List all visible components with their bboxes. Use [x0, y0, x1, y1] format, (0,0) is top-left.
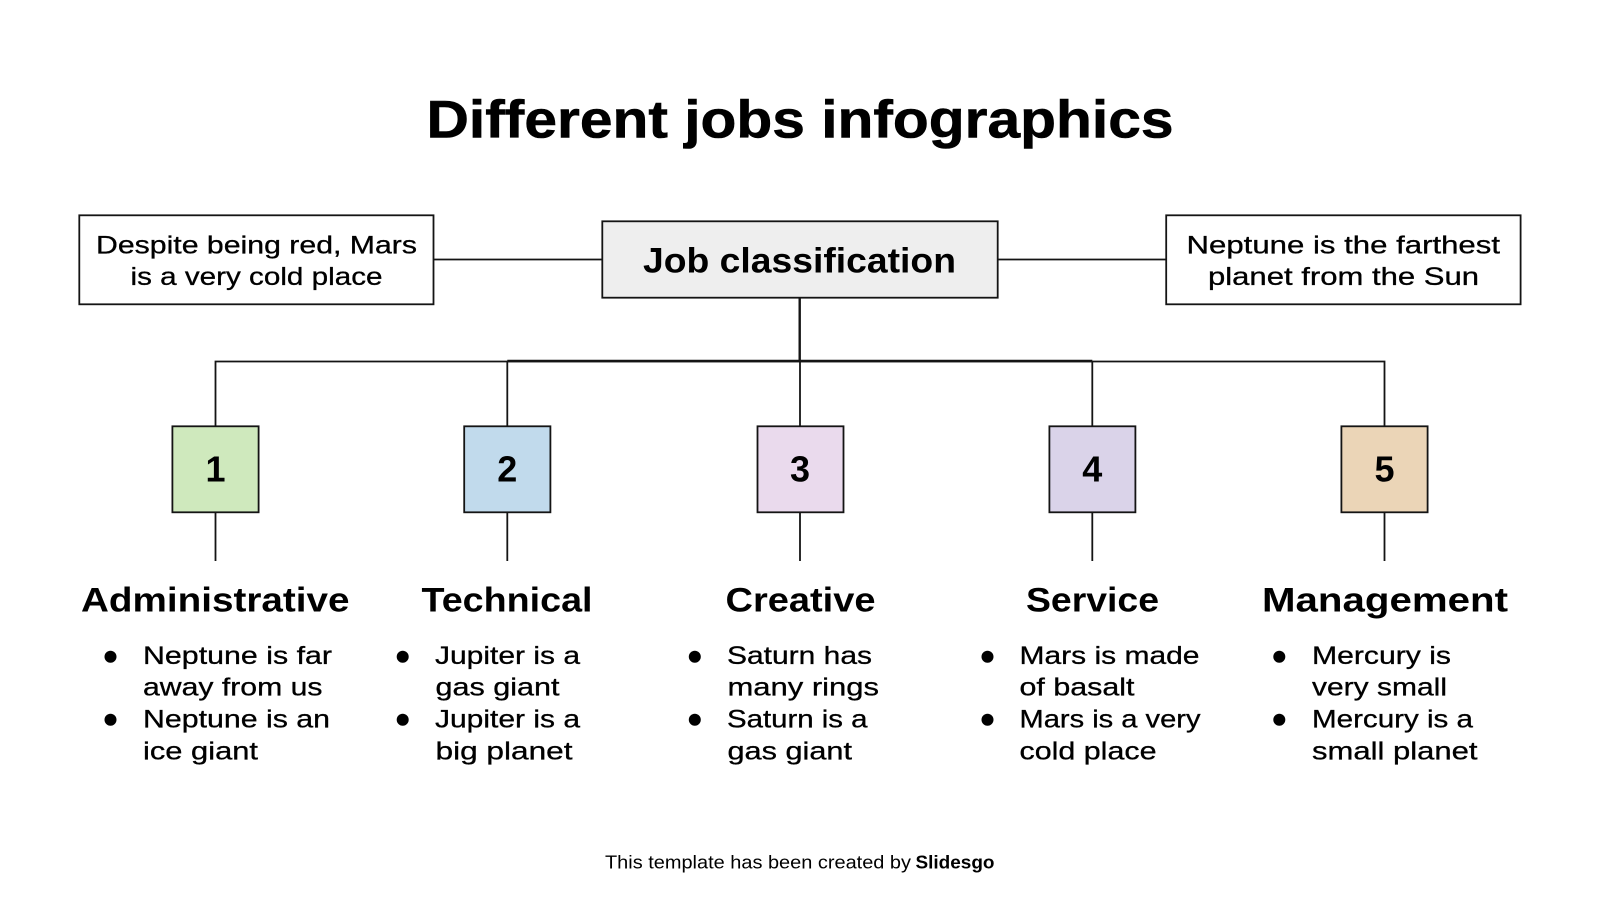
column: Administrative: [81, 426, 350, 765]
bullet list: Service: Mars is a very: [1020, 706, 1201, 734]
bullet list: Administrative: Neptune is an: [143, 706, 330, 734]
bullet list: Service: [982, 642, 1201, 765]
bullet list: Administrative: Neptune is far: [143, 642, 332, 670]
heading: Management: Management: [1262, 582, 1508, 620]
central box: job classification: Job classification: [643, 242, 956, 280]
number box 5: [1341, 426, 1428, 512]
bullet list: Technical: Jupiter is a: [435, 642, 580, 670]
bullet list: Technical: Jupiter is a: [435, 706, 580, 734]
bullet list: Technical: [397, 642, 580, 765]
column: Service: [982, 426, 1201, 765]
bullet list: Service: of basalt: [1020, 674, 1135, 702]
callout: Neptune: Neptune is the farthest: [1186, 231, 1500, 259]
heading: Administrative: Administrative: [81, 582, 350, 620]
bullet list: Creative: Saturn is a: [727, 706, 868, 734]
bullet list: Service: cold place: [1020, 737, 1156, 765]
bullet list: Administrative: [104, 642, 332, 765]
callout: Mars: [79, 215, 434, 304]
callout: Neptune: planet from the Sun: [1208, 263, 1479, 291]
number box 4: 4: [1082, 449, 1102, 490]
bullet list: Creative: many rings: [728, 674, 879, 702]
number box 4: [1049, 426, 1135, 512]
number box 5: 5: [1374, 449, 1395, 490]
bullet list: Creative: Saturn has: [727, 642, 872, 670]
bullet list: Technical: gas giant: [436, 674, 560, 702]
number box 3: [758, 426, 844, 512]
footer credit: Slidesgo: [916, 852, 995, 872]
bullet list: Management: small planet: [1312, 737, 1478, 765]
heading: Service: Service: [1026, 582, 1159, 620]
number box 1: 1: [205, 449, 226, 490]
central box: job classification: [602, 221, 998, 298]
connector lines: [216, 260, 1384, 561]
callout: Mars: Despite being red, Mars: [96, 231, 417, 259]
bullet list: Management: Mercury is: [1312, 642, 1451, 670]
bullet list: Management: very small: [1312, 674, 1447, 702]
number box 2: [464, 426, 550, 512]
bullet list: Service: Mars is made: [1020, 642, 1200, 670]
bullet list: Management: [1273, 642, 1478, 765]
heading: Technical: Technical: [422, 582, 592, 620]
bullet list: Technical: big planet: [436, 737, 573, 765]
column: Technical: [397, 426, 592, 765]
column: Creative: [689, 426, 879, 765]
callout: Mars: is a very cold place: [130, 263, 382, 291]
bullet list: Creative: gas giant: [728, 737, 852, 765]
bullet list: Administrative: ice giant: [143, 737, 258, 765]
bullet list: Management: Mercury is a: [1312, 706, 1473, 734]
bullet list: Administrative: away from us: [143, 674, 322, 702]
column: Management: [1262, 426, 1508, 765]
callout: Neptune: [1166, 215, 1521, 304]
number box 1: [172, 426, 259, 512]
heading: Creative: Creative: [726, 582, 876, 620]
number box 3: 3: [790, 449, 810, 490]
footer credit: This template has been created by: [605, 852, 911, 872]
number box 2: 2: [497, 449, 517, 490]
title: Different jobs infographics: [426, 90, 1174, 150]
bullet list: Creative: [689, 642, 879, 765]
